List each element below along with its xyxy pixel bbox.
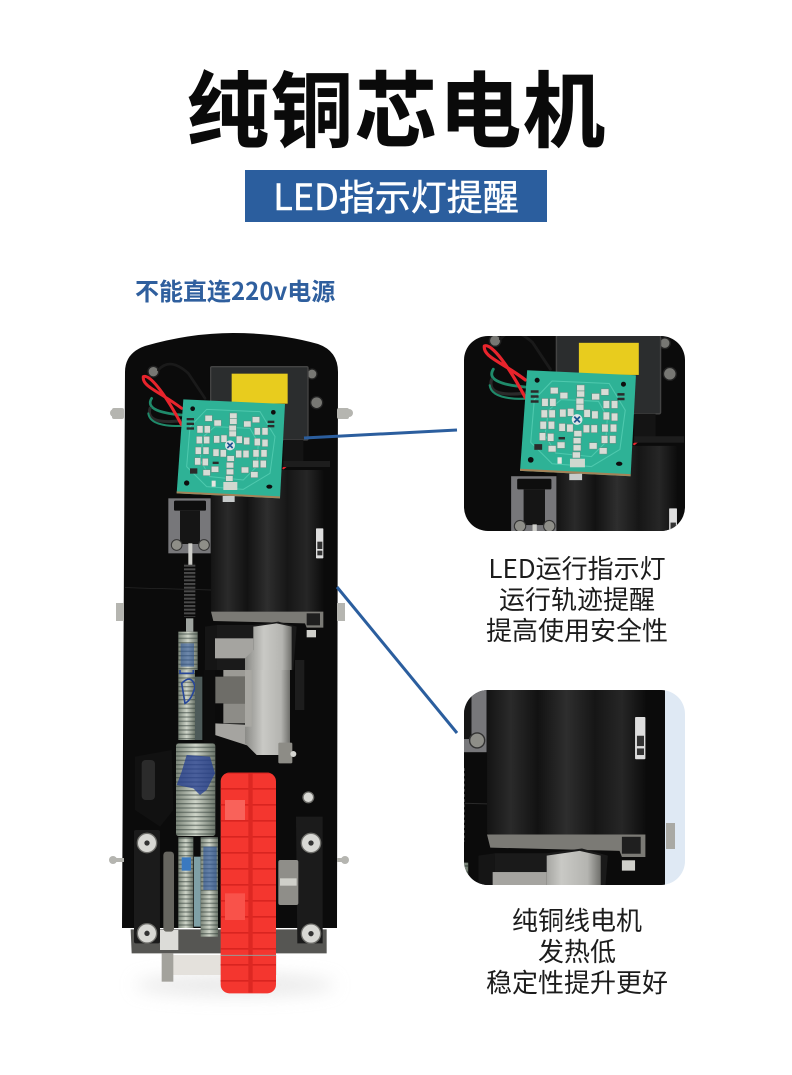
panel seam [125,588,211,590]
spring [184,563,195,617]
lower gears [178,837,193,928]
side screws [109,408,353,864]
bottom plate [131,929,327,953]
motor label [316,528,323,558]
red wheel [221,773,276,993]
floor shadow [135,975,335,995]
upper gear [178,632,198,670]
gearbox collar [211,612,323,628]
connector line to motor inset [337,587,457,733]
title: 纯铜芯电机 [187,45,607,164]
gearbox casing lower [223,660,250,677]
black mounting panel [122,333,338,928]
micro switch bracket [168,498,211,553]
large gear [176,743,215,836]
subtitle banner: LED指示灯提醒 [273,169,519,221]
connector line to LED inset [304,430,457,438]
left motor knob [135,750,173,827]
motor cylinder [283,461,330,467]
mounting screws [148,366,323,409]
LED circuit board [177,399,285,502]
caption: LED indicator: 运行轨迹提醒 [499,580,655,617]
lower mechanism [131,660,327,993]
caption: copper motor [486,901,668,1000]
gearbox body [205,625,217,670]
left bracket [134,830,160,943]
capacitor box with yellow label [211,367,308,440]
LED chips [195,413,268,481]
centre screw [225,440,235,450]
inset: LED board close-up [464,336,685,531]
caption: copper motor: 纯铜线电机 [512,901,642,938]
inset: motor close-up [464,690,685,885]
caption: copper motor: 发热低 [538,932,616,969]
caption: copper motor: 稳定性提升更好 [486,963,668,1000]
cable bundle [143,364,291,468]
bracket screws [137,792,321,943]
caption: LED indicator [486,549,668,648]
caption: LED indicator: 提高使用安全性 [486,611,668,648]
upper mechanism [125,364,330,670]
axle [278,860,298,905]
product photo: door motor unit [109,333,353,993]
top gear train [178,660,195,740]
right bracket [296,817,323,943]
resistor chips [187,418,274,490]
caption: LED indicator: LED运行指示灯 [488,549,666,586]
mounting holes [184,406,276,489]
power warning note: 不能直连220v电源 [135,272,335,307]
